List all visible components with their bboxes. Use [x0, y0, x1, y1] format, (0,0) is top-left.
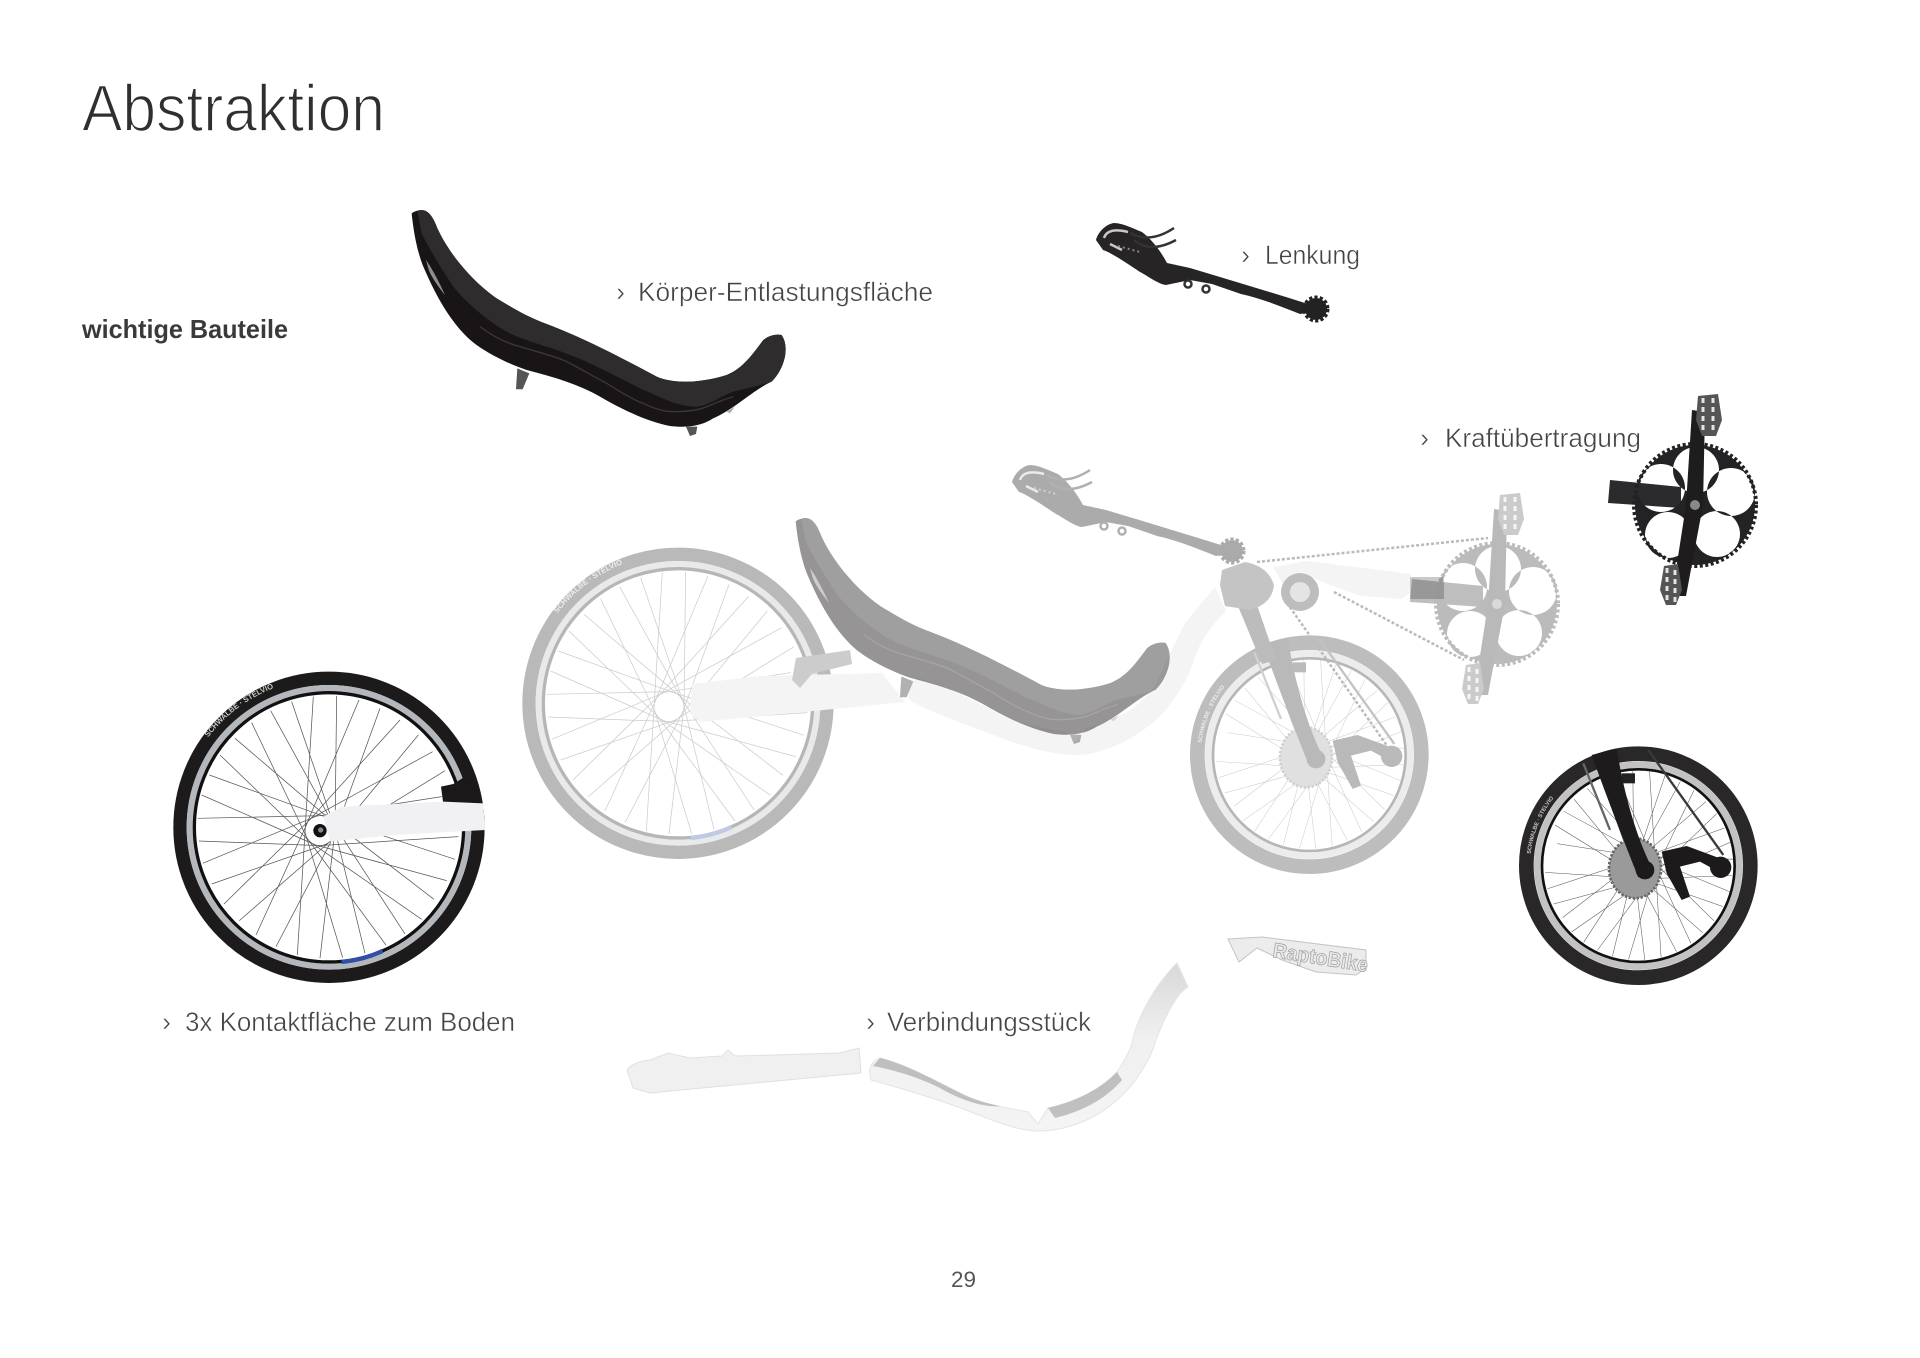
seat ridge: [480, 327, 733, 412]
faded rear wheel: [529, 554, 827, 852]
faded chain: [1257, 538, 1488, 760]
frame part: curved main tube: [870, 963, 1188, 1131]
seat highlight: [426, 260, 445, 295]
bottom bracket tube: [1608, 480, 1681, 508]
tube shading: [873, 1058, 1122, 1118]
faded frame tubes: [690, 561, 1411, 755]
label: Körper-Entlastungsfläche: Körper-Entlastungsfläche: [638, 277, 933, 307]
label: Lenkung: ›: [1241, 240, 1250, 270]
frame part: top piece with RaptoBike logo: [1228, 937, 1370, 977]
white frame tube: [323, 802, 485, 842]
grip detail: [1104, 230, 1128, 250]
front tyre: [1526, 754, 1750, 978]
chainring: [1634, 444, 1756, 566]
front wheel component: [1519, 746, 1758, 985]
logo text: RaptoBike: [1271, 939, 1370, 977]
rim: [190, 688, 468, 967]
label: Kraftübertragung: Kraftübertragung: [1445, 423, 1641, 453]
hub: [313, 824, 327, 837]
seat component: [412, 210, 786, 436]
faded fork extension: [1238, 602, 1276, 664]
title: Abstraktion: [82, 71, 385, 145]
seat cushion: [417, 210, 786, 407]
tyre lettering: SCHWALBE · STELVIO: [205, 684, 273, 736]
faded head block and idler: [792, 562, 1444, 688]
derailleur: [1622, 773, 1731, 900]
front rim: [1537, 765, 1739, 967]
crank and chainring component: [1608, 394, 1756, 605]
faded complete recumbent bike: [529, 465, 1558, 867]
chain: [1583, 750, 1723, 855]
front tyre lettering: SCHWALBE · STELVIO: [1526, 796, 1553, 854]
top pedal: [1696, 394, 1722, 436]
brake levers: [1130, 228, 1210, 292]
steering tube: [1096, 223, 1312, 314]
crank arm: [1672, 410, 1705, 596]
seat shell: [412, 210, 786, 427]
label: Verbindungsstück: ›: [866, 1007, 875, 1037]
front spokes: [1545, 771, 1733, 960]
faded front wheel: [1197, 637, 1421, 867]
faded steering: [1012, 465, 1243, 562]
steering component: [1096, 223, 1327, 320]
label: Kraftübertragung: ›: [1420, 423, 1429, 453]
tyre: [180, 678, 478, 976]
cassette: [1609, 838, 1661, 898]
bottom pedal: [1660, 564, 1682, 605]
subheading: wichtige Bauteile: wichtige Bauteile: [81, 314, 288, 344]
label: 3x Kontaktfläche zum Boden: ›: [162, 1007, 171, 1037]
frame part: rear tube: [627, 1048, 861, 1093]
page number: 29: [951, 1267, 976, 1292]
seat mounts: [516, 368, 697, 436]
fork: [1592, 748, 1654, 877]
label: Verbindungsstück: Verbindungsstück: [887, 1007, 1091, 1037]
steering head: [1305, 298, 1327, 320]
brake: [441, 777, 480, 804]
label: Körper-Entlastungsfläche: ›: [616, 277, 625, 307]
rear wheel component: [173, 672, 485, 983]
label: Lenkung: Lenkung: [1265, 240, 1360, 270]
rim decal: [342, 951, 383, 962]
faded seat: [796, 518, 1170, 744]
faded crank: [1410, 493, 1558, 704]
label: 3x Kontaktfläche zum Boden: 3x Kontaktfläche zum Boden: [185, 1007, 515, 1037]
spokes: [198, 696, 458, 958]
